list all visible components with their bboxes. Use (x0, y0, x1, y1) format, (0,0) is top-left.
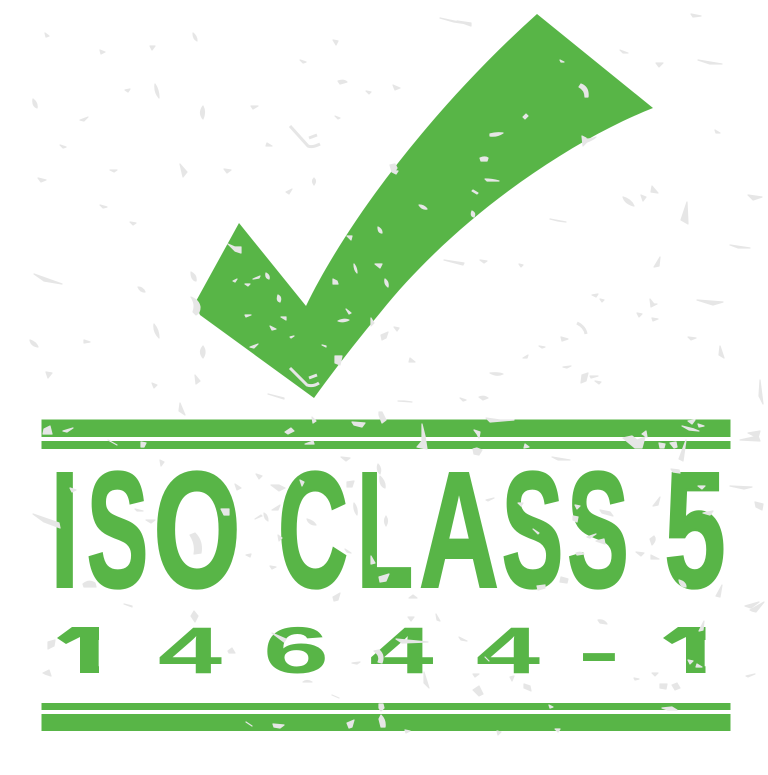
digit 1: 1 (40, 613, 128, 687)
squiggle marks (290, 126, 586, 386)
title: ISO CLASS 5: A (419, 438, 499, 622)
title: ISO CLASS 5: 5 (664, 438, 726, 622)
bottom double rule (42, 703, 730, 731)
standard number: 14644-1: - (578, 615, 620, 688)
title: ISO CLASS 5: S (87, 439, 148, 623)
title: ISO CLASS 5: O (153, 437, 241, 622)
digit 1 (663, 627, 706, 673)
standard number: 14644-1: 4 (369, 613, 434, 687)
top double rule (42, 420, 730, 449)
title: ISO CLASS 5: C (278, 437, 348, 622)
title: ISO CLASS 5: S (502, 439, 563, 623)
standard number: 14644-1: 4 (158, 613, 222, 687)
title: ISO CLASS 5 (50, 437, 726, 623)
digit 1: 1 (646, 613, 734, 687)
standard number: 14644-1: 6 (263, 614, 329, 687)
standard number: 14644-1 (57, 626, 706, 674)
title: ISO CLASS 5: L (357, 439, 413, 623)
icon: check mark (195, 14, 653, 398)
title: ISO CLASS 5: S (567, 439, 629, 623)
title: ISO CLASS 5: I (50, 439, 79, 623)
digit 1 (57, 627, 99, 673)
standard number: 14644-1: 4 (476, 613, 540, 687)
